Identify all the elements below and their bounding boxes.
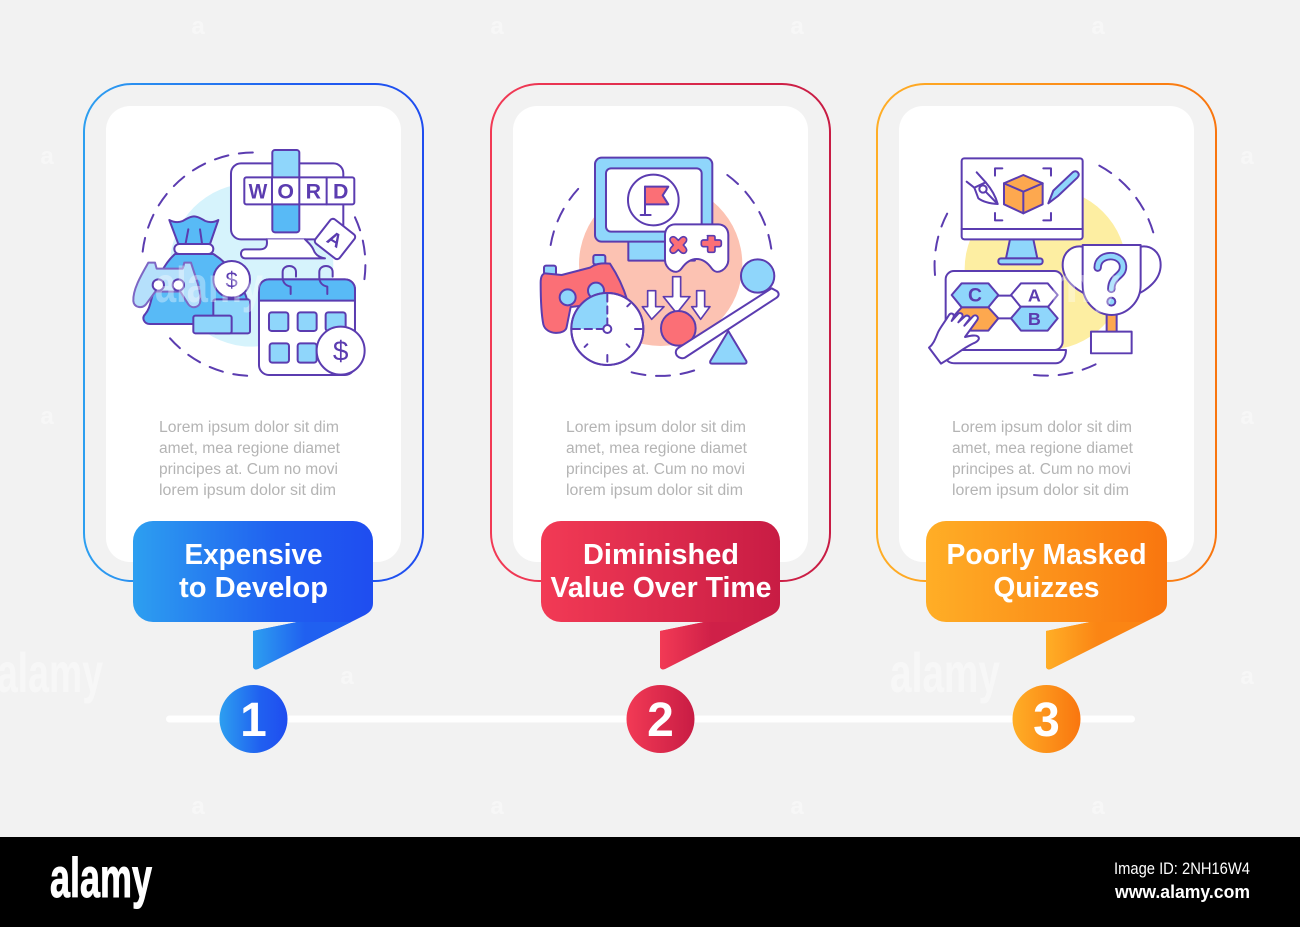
body text: Lorem ipsum dolor sit dim: [952, 419, 1132, 436]
footer logo: alamy: [50, 846, 152, 909]
body text: principes at. Cum no movi: [952, 461, 1131, 478]
watermark pattern: a: [191, 13, 205, 40]
watermark pattern: a: [1240, 403, 1254, 430]
card outline: [877, 84, 1216, 581]
watermark pattern: a: [191, 793, 205, 820]
callout: heading: Quizzes: [994, 572, 1100, 604]
icon: quiz design: [929, 158, 1161, 376]
callout: heading: Value Over Time: [550, 572, 772, 604]
icon: game development cost: O: [277, 180, 294, 204]
callout: heading: Expensive: [184, 539, 322, 571]
body text: principes at. Cum no movi: [159, 461, 338, 478]
watermark pattern: a: [40, 403, 54, 430]
number 2: [626, 685, 694, 753]
body text: lorem ipsum dolor sit dim: [566, 482, 743, 499]
callout: heading: [133, 521, 373, 669]
icon: game development cost: $: [333, 336, 349, 367]
image id: Image ID: 2NH16W4: [1114, 859, 1250, 878]
icon: quiz design: A: [1028, 286, 1041, 306]
body text: [159, 419, 341, 499]
watermark overlays: alamy: [155, 257, 263, 313]
icon: quiz design: C: [968, 286, 982, 307]
icon: game development cost: W: [249, 180, 268, 204]
callout: heading: to Develop: [179, 572, 328, 604]
watermark overlays: my: [1050, 257, 1120, 313]
watermark pattern: a: [1240, 143, 1254, 170]
panel: poorly masked quizzes: [877, 84, 1216, 753]
watermark pattern: a: [40, 143, 54, 170]
callout: heading: Poorly Masked: [946, 539, 1146, 571]
watermark pattern: a: [490, 793, 504, 820]
body text: amet, mea regione diamet: [566, 440, 748, 457]
number 2: 2: [647, 694, 674, 747]
watermark pattern: a: [790, 793, 804, 820]
callout: heading: [926, 521, 1167, 669]
card body: [899, 106, 1194, 562]
number 1: [220, 685, 288, 753]
icon: game development cost: R: [306, 180, 321, 204]
body text: lorem ipsum dolor sit dim: [159, 482, 336, 499]
body text: [566, 419, 748, 499]
watermark pattern: a: [1091, 13, 1105, 40]
body text: Lorem ipsum dolor sit dim: [159, 419, 339, 436]
body text: amet, mea regione diamet: [159, 440, 341, 457]
watermark overlays: [155, 257, 1120, 313]
card body: [513, 106, 808, 562]
watermark pattern: alamy: [890, 641, 1000, 704]
watermark pattern: a: [490, 13, 504, 40]
body text: Lorem ipsum dolor sit dim: [566, 419, 746, 436]
panel: diminished value over time: [491, 84, 830, 753]
website: www.alamy.com: [1114, 882, 1250, 902]
body text: lorem ipsum dolor sit dim: [952, 482, 1129, 499]
icon: game development cost: D: [333, 180, 348, 204]
watermark pattern: a: [790, 13, 804, 40]
icon: game development cost: $: [226, 267, 238, 292]
card body: [106, 106, 401, 562]
callout: heading: Diminished: [583, 539, 739, 571]
card outline: [491, 84, 830, 581]
watermark pattern: alamy: [0, 641, 103, 704]
icon: value decline: [541, 158, 779, 376]
footer band: [0, 837, 1300, 927]
number 1: 1: [240, 694, 267, 747]
icon: game development cost: A: [323, 228, 346, 253]
card outline: [84, 84, 423, 581]
number 3: 3: [1033, 694, 1060, 747]
panel: expensive to develop: [84, 84, 423, 753]
watermark pattern: a: [340, 663, 354, 690]
body text: [952, 419, 1134, 499]
body text: principes at. Cum no movi: [566, 461, 745, 478]
timeline line: [166, 716, 1135, 722]
icon: game development cost: [133, 150, 365, 376]
callout: heading: [541, 521, 780, 669]
watermark pattern: a: [1240, 663, 1254, 690]
watermark pattern: a: [1091, 793, 1105, 820]
icon: quiz design: B: [1028, 309, 1041, 329]
body text: amet, mea regione diamet: [952, 440, 1134, 457]
number 3: [1012, 685, 1080, 753]
